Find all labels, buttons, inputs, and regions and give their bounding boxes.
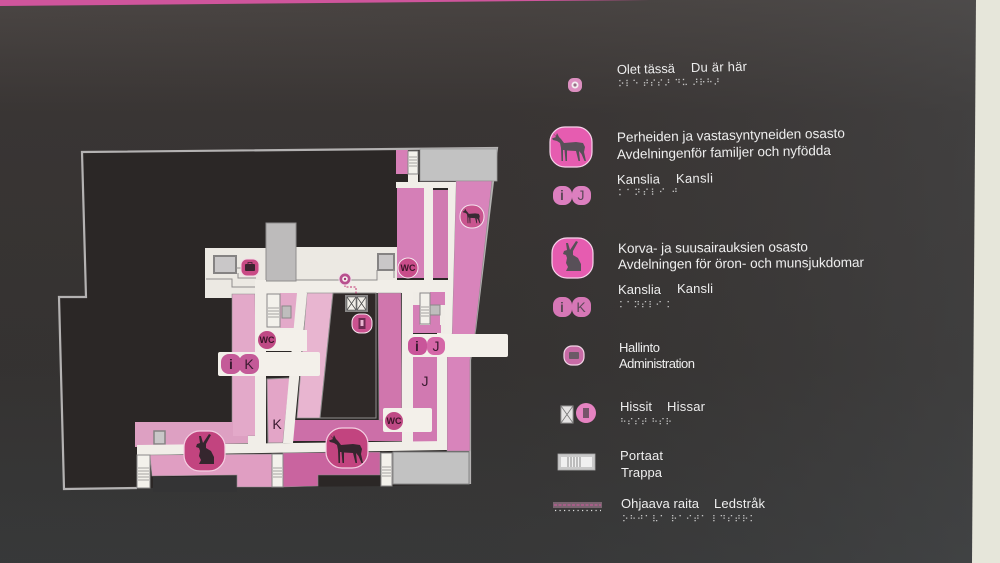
legend: you are here: ⠕⠇⠑ ⠞⠎⠎⠜ ⠙⠥ ⠜⠗⠓⠜	[618, 77, 720, 90]
elevators	[345, 295, 368, 312]
icon: rabbit large	[184, 431, 225, 471]
stairs	[137, 151, 440, 488]
icon: i K signs: i	[229, 356, 233, 372]
legend: elevators: Hissar	[667, 399, 706, 414]
icon: lift	[352, 314, 372, 333]
right wall strip	[972, 0, 1000, 563]
legend: administration: Administration	[619, 356, 695, 371]
icon: i K: i	[560, 299, 564, 315]
icon: deer large	[326, 428, 368, 468]
building outline	[59, 148, 497, 489]
legend: office K: Kanslia	[618, 282, 662, 297]
legend: elevators: ⠓⠎⠎⠞ ⠓⠎⠗	[620, 417, 672, 428]
legend: family ward: Perheiden ja vastasyntyneiden osasto	[617, 126, 845, 145]
icon: i J: i	[560, 187, 564, 203]
icon: i J signs: i	[415, 338, 419, 354]
wing: north-west cream offices	[205, 223, 450, 330]
icon: i J	[553, 186, 591, 205]
icon: administration	[241, 259, 259, 276]
legend: office J: Kansli	[676, 170, 713, 186]
icon: i J: J	[578, 187, 584, 203]
guide line to elevators	[345, 285, 356, 295]
legend: ear and mouth ward: Avdelningen för öron- och munsjukdomar	[618, 255, 864, 272]
legend: administration	[564, 340, 695, 371]
grey room south-east	[393, 452, 469, 484]
icon: target	[568, 78, 582, 92]
legend: office J: ⠅⠁⠝⠎⠇⠊ ⠚	[618, 187, 678, 199]
legend: office K: ⠅⠁⠝⠎⠇⠊ ⠅	[619, 300, 673, 311]
legend: office J	[553, 170, 713, 205]
icon: deer east	[460, 205, 484, 228]
wing: west pink column	[232, 294, 257, 443]
label J: J	[422, 373, 428, 389]
top magenta strip	[0, 0, 650, 6]
legend: office J: Kanslia	[617, 171, 661, 187]
sign plates	[218, 330, 508, 432]
icon: rabbit	[552, 238, 593, 278]
notch outside building	[153, 476, 237, 492]
icon: i K signs: K	[244, 356, 254, 372]
icon: deer	[550, 127, 592, 167]
legend: family ward	[550, 126, 845, 167]
east wing rooms	[396, 149, 497, 451]
icon: i K signs	[221, 354, 259, 374]
legend: you are here: Du är här	[691, 59, 748, 75]
legend: family ward: Avdelningenför familjer och nyfödda	[617, 143, 831, 162]
icon: briefcase	[564, 346, 584, 365]
legend: office K	[553, 281, 713, 317]
legend: guide strip: Ohjaava raita	[621, 496, 700, 511]
icon: wc west: WC	[260, 335, 275, 345]
legend: ear and mouth ward	[552, 238, 864, 278]
icon: i J signs: J	[432, 338, 440, 354]
icon: wc west	[258, 331, 276, 349]
legend: stairs	[558, 448, 663, 480]
legend: ear and mouth ward: Korva- ja suusairauksien osasto	[618, 239, 808, 256]
icon: you are here	[339, 273, 351, 285]
icon: i K: K	[576, 299, 586, 315]
legend: stairs: Trappa	[621, 465, 663, 480]
legend: elevators	[561, 399, 706, 428]
icon: i J signs	[408, 337, 445, 355]
legend: you are here: Olet tässä	[617, 61, 676, 77]
legend: elevators: Hissit	[620, 399, 652, 414]
legend: you are here	[568, 59, 748, 92]
floor map	[59, 148, 508, 492]
icon: stairs	[558, 454, 595, 470]
icon: wc north: WC	[400, 263, 416, 273]
legend: administration: Hallinto	[619, 340, 660, 355]
icon: wc south	[385, 412, 403, 430]
legend: guide strip	[553, 496, 766, 525]
icon: guide strip	[553, 502, 602, 510]
icon: elevator	[561, 403, 596, 423]
wing: south-west band	[135, 422, 380, 487]
label K: K	[272, 416, 282, 432]
legend: guide strip: ⠕⠓⠚⠁⠧⠁ ⠗⠁⠊⠞⠁ ⠇⠙⠎⠞⠗⠅	[622, 514, 756, 525]
icon: i K	[553, 297, 591, 317]
icon: wc north	[398, 258, 418, 278]
legend: office K: Kansli	[677, 281, 713, 296]
icon: wc south: WC	[386, 416, 402, 426]
legend: guide strip: Ledstråk	[714, 496, 766, 511]
corridors	[137, 280, 447, 455]
central pink rooms	[267, 293, 403, 443]
legend: stairs: Portaat	[620, 448, 663, 463]
